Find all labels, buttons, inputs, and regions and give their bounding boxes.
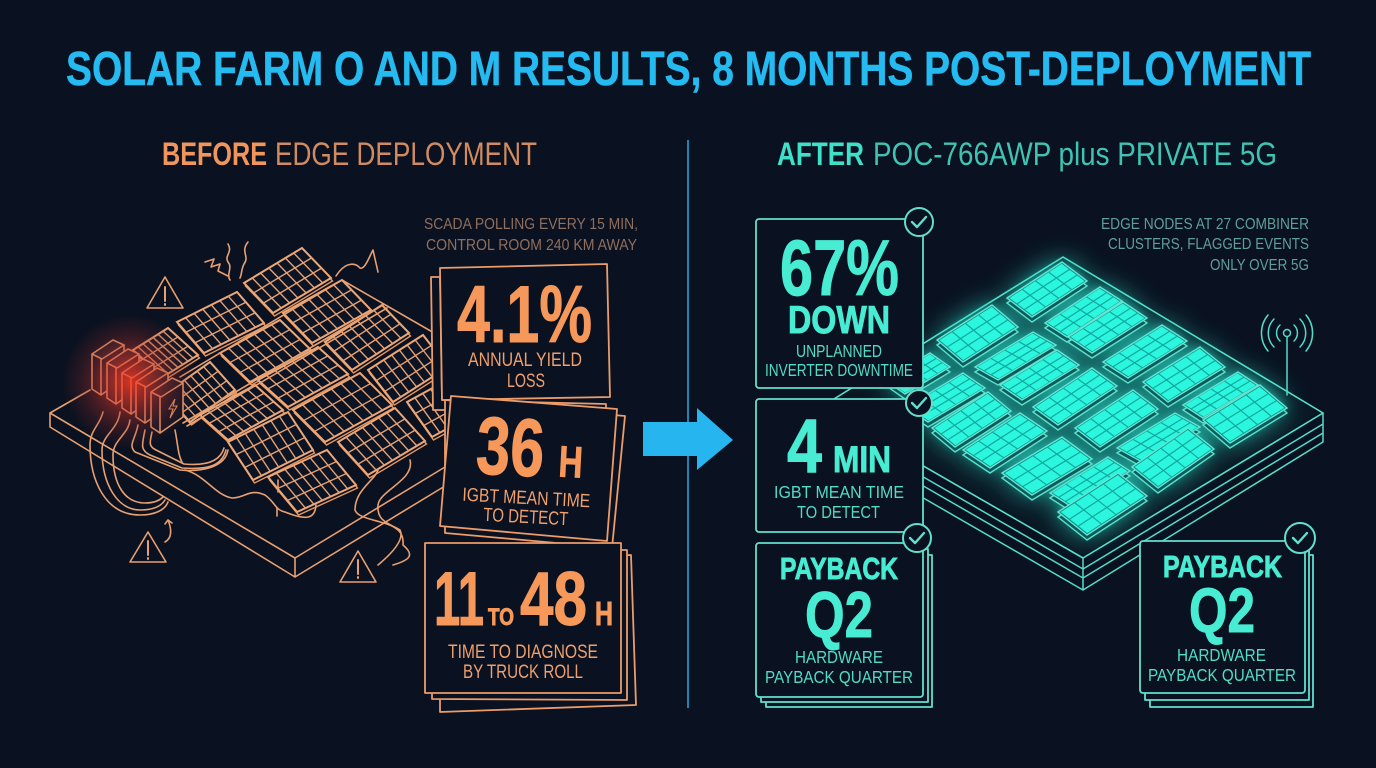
cabling	[90, 412, 410, 565]
label: HARDWARE	[795, 647, 883, 667]
stat: 4 min	[787, 404, 891, 489]
icon: check badge	[905, 208, 933, 236]
arrow: before to after	[643, 408, 733, 470]
panel rails	[180, 280, 387, 426]
heading: after: POC-766AWP plus PRIVATE 5G	[873, 136, 1277, 172]
label: IGBT MEAN TIME	[774, 482, 904, 502]
illustration: failing solar array	[50, 242, 488, 582]
platform layers	[821, 413, 1323, 590]
heading: after: AFTER	[777, 136, 864, 172]
label	[765, 647, 913, 687]
stat: 11 to 48 h: 11	[434, 557, 484, 642]
warning icon	[340, 551, 376, 582]
label: INVERTER DOWNTIME	[765, 360, 913, 380]
interference squiggles	[205, 242, 378, 280]
label: LOSS	[507, 371, 545, 392]
note: scada polling: SCADA POLLING EVERY 15 MIN,	[424, 216, 638, 233]
stat: 4.1%: 4.1%	[457, 270, 592, 360]
label: UNPLANNED	[796, 341, 882, 361]
heading: before: BEFORE	[162, 136, 267, 172]
stat: 11 to 48 h	[434, 557, 613, 642]
illustration: healthy solar array	[821, 257, 1323, 590]
icon: check badge	[1285, 523, 1315, 553]
label	[1148, 645, 1296, 685]
stat: 11 to 48 h: H	[595, 595, 613, 632]
label: TIME TO DIAGNOSE	[448, 642, 598, 663]
overheating glow	[62, 314, 198, 450]
stat: 36 h: H	[557, 437, 584, 488]
label: PAYBACK QUARTER	[1148, 665, 1296, 685]
stat: 4 min: MIN	[833, 439, 891, 480]
platform top	[821, 257, 1323, 558]
stat: payback: PAYBACK	[780, 551, 898, 586]
label: IGBT MEAN TIME	[462, 485, 591, 512]
stat: 11 to 48 h: TO	[488, 604, 514, 631]
card: 4 min	[756, 390, 932, 532]
label	[774, 482, 904, 522]
note: edge nodes: EDGE NODES AT 27 COMBINER	[1101, 216, 1309, 233]
label: TO DETECT	[483, 505, 569, 530]
center divider	[687, 140, 689, 708]
label: ANNUAL YIELD	[468, 350, 582, 371]
card: 11 to 48 h diagnose	[425, 543, 636, 712]
solar panels, teal filled	[885, 262, 1287, 535]
label	[765, 341, 913, 380]
solar panels, orange outline	[134, 251, 488, 515]
note: edge nodes	[1101, 216, 1309, 274]
label: PAYBACK QUARTER	[765, 667, 913, 687]
heading: before	[162, 136, 537, 172]
label	[462, 485, 591, 530]
note: edge nodes: CLUSTERS, FLAGGED EVENTS	[1108, 236, 1309, 253]
note: scada polling: CONTROL ROOM 240 KM AWAY	[426, 237, 637, 254]
icon: check badge	[906, 390, 932, 416]
heading: before: EDGE DEPLOYMENT	[275, 136, 537, 172]
stat: 11 to 48 h: 48	[520, 557, 587, 642]
stat: q2: Q2	[805, 578, 873, 651]
stat: payback: PAYBACK	[1163, 549, 1282, 584]
label: TO DETECT	[797, 502, 880, 522]
stat: 4 min: 4	[787, 404, 822, 489]
icon: 5g antenna	[1261, 315, 1313, 395]
note: edge nodes: ONLY OVER 5G	[1210, 257, 1309, 274]
card: 67% down	[756, 208, 933, 388]
label	[448, 642, 598, 683]
label	[468, 350, 582, 392]
stat: q2: Q2	[1189, 576, 1255, 646]
platform base	[50, 280, 455, 577]
card: payback q2	[756, 524, 932, 707]
card: 36 h to detect	[440, 396, 625, 548]
warning icon	[147, 277, 183, 308]
label: BY TRUCK ROLL	[463, 662, 583, 683]
stat: down: DOWN	[788, 299, 890, 342]
card: annual yield loss	[431, 264, 610, 410]
card: payback q2 lower right	[1140, 523, 1315, 707]
stat: 67%: 67%	[780, 223, 899, 312]
panel depth	[885, 267, 1287, 540]
icon: check badge	[903, 524, 931, 552]
inverter row	[92, 340, 183, 433]
stat: 36 h: 36	[474, 400, 547, 495]
warning icon	[130, 532, 166, 562]
small curved arrow	[165, 520, 172, 542]
panel glow, tight	[885, 262, 1287, 535]
label: HARDWARE	[1177, 645, 1266, 665]
panel glow, wide	[885, 262, 1287, 535]
note: scada polling	[424, 216, 638, 254]
